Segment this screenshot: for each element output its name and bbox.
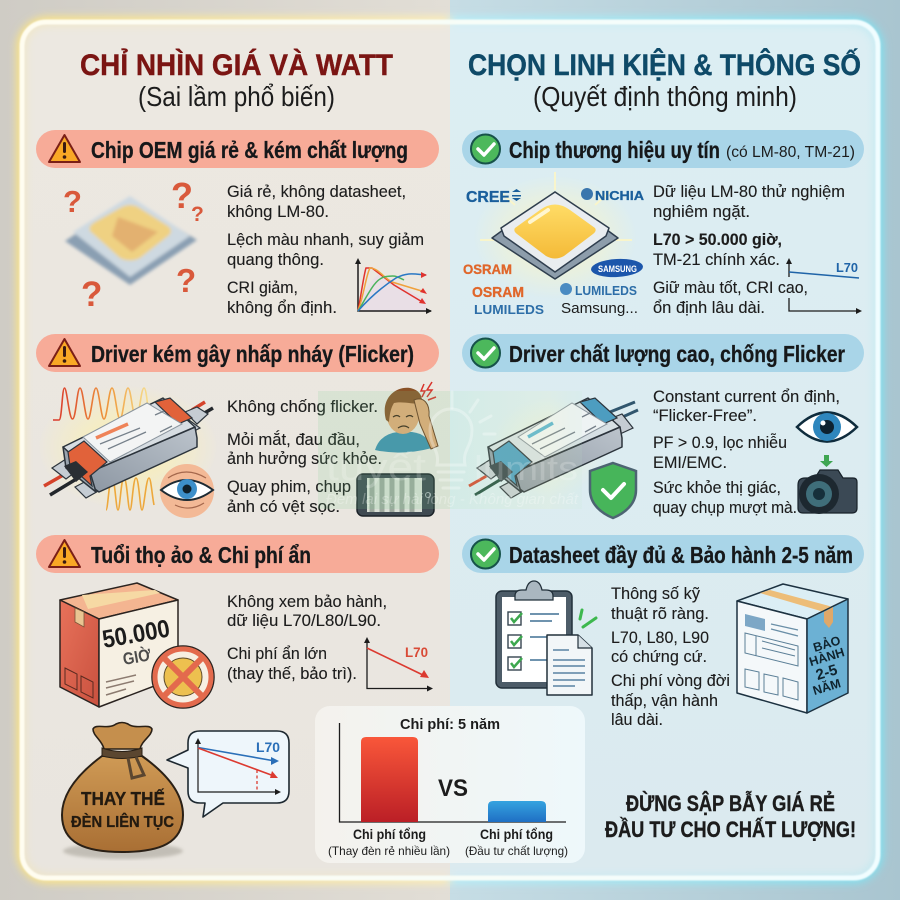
chart: stable L70: L70 [836, 260, 858, 275]
illustration: 50.000 hour box: GIỜ [121, 645, 153, 669]
panel: cost comparison chart: Chi phí: 5 năm [400, 716, 500, 733]
illustration: money bag: ĐÈN LIÊN TỤC [71, 812, 174, 831]
text: datasheet: Chi phí vòng đời [611, 671, 730, 690]
watermark [318, 391, 582, 509]
orange caps [68, 441, 107, 486]
illustration: 50.000 hour box: 50.000 [100, 615, 172, 654]
brand logos: LUMILEDS [575, 284, 637, 298]
banner: chip brand [462, 130, 864, 168]
question marks: ? [191, 203, 204, 226]
terminal block [489, 461, 513, 482]
right heading: CHỌN LINH KIỆN & THÔNG SỐ [468, 48, 861, 82]
banner: driver flicker: Driver kém gây nhấp nháy (Flicker) [91, 341, 414, 367]
illustration: flickering driver [38, 385, 218, 518]
text: chip brand: nghiêm ngặt. [653, 202, 750, 221]
watermark: tuyết [326, 447, 427, 489]
text: chip brand: ổn định lâu dài. [653, 298, 765, 317]
illustration: warranty box: BẢO [811, 632, 842, 655]
illustration: warranty box: HÀNH [807, 644, 846, 669]
brand logos: SAMSUNG [598, 264, 637, 274]
text: driver flicker: Mỏi mắt, đau đầu, [227, 430, 360, 449]
text: datasheet: thấp, vận hành [611, 691, 718, 710]
label plate [83, 403, 182, 462]
brand logos [463, 188, 645, 317]
text: chip OEM: không ổn định. [227, 298, 337, 317]
brand logos: LUMILEDS [474, 302, 544, 317]
brand logos: OSRAM [472, 284, 524, 301]
text: driver flicker: Không chống flicker. [227, 397, 378, 416]
icon: check [471, 134, 500, 164]
chart: falling L70 [364, 637, 433, 692]
chart: degradation curves [355, 258, 432, 314]
document [547, 635, 592, 695]
text: datasheet: thuật rõ ràng. [611, 604, 709, 623]
bar label: cheap [328, 826, 450, 858]
text: driver quality: “Flicker-Free”. [653, 406, 757, 425]
banner: chip brand: Chip thương hiệu uy tín [509, 137, 720, 163]
question marks: ? [171, 175, 193, 216]
text: chip OEM: không LM-80. [227, 202, 329, 221]
mount tabs [52, 407, 208, 498]
banner: lifespan: Tuổi thọ ảo & Chi phí ẩn [91, 542, 311, 568]
flicker waves [53, 388, 154, 510]
icon: warning [49, 135, 80, 162]
text: datasheet [611, 584, 730, 729]
illustration: quality driver [469, 397, 638, 518]
illustration: money bag: THAY THẾ [81, 788, 165, 809]
question marks: ? [176, 262, 196, 299]
illustration: warranty box: NĂM [811, 675, 842, 698]
text: driver flicker [227, 397, 382, 516]
bar label: cheap: (Thay đèn rẻ nhiều lần) [328, 844, 450, 858]
illustration: warranty box: 2-5 [814, 661, 840, 684]
illustration: quality chip with brands: Samsung... [561, 300, 638, 317]
left heading [80, 48, 393, 112]
bar: cheap lamps [361, 737, 418, 822]
bar: quality [488, 801, 546, 822]
conclusion: ĐỪNG SẬP BẪY GIÁ RẺ [626, 790, 835, 816]
text: driver flicker: Quay phim, chụp [227, 477, 351, 496]
icon: check [471, 338, 500, 368]
blue caps [493, 441, 532, 486]
watermark: Đem lại sự hài lòng - Không gian chất [326, 491, 579, 508]
icon: man with headache [375, 382, 438, 453]
callout: speech bubble chart: L70 [256, 739, 280, 755]
chart: falling L70: L70 [405, 644, 428, 660]
panel: cost comparison chart [315, 706, 585, 863]
icon: check [471, 540, 500, 568]
icon: prohibited gear [152, 646, 214, 708]
callout: speech bubble chart [167, 731, 289, 817]
icon: camera [798, 470, 857, 514]
text: driver quality: Sức khỏe thị giác, [653, 478, 781, 497]
banner: datasheet [462, 535, 864, 573]
chart: stable L70 [786, 258, 862, 314]
banner: driver flicker [36, 334, 439, 372]
panel: cost comparison chart: VS [438, 775, 468, 802]
text: datasheet: lâu dài. [611, 710, 663, 729]
text: driver flicker: ảnh hưởng sức khỏe. [227, 449, 382, 468]
illustration: clipboard and document [496, 581, 596, 695]
text: lifespan: Không xem bảo hành, [227, 592, 387, 611]
text: driver quality: Constant current ổn định, [653, 387, 840, 406]
wires [44, 402, 205, 486]
text: datasheet: Thông số kỹ [611, 584, 700, 603]
icon: clear eye [797, 412, 857, 442]
icon: tired eye [160, 464, 214, 518]
left heading: CHỈ NHÌN GIÁ VÀ WATT [80, 48, 393, 82]
question marks [63, 175, 204, 314]
text: lifespan: (thay thế, bảo trì). [227, 664, 357, 683]
question marks: ? [81, 275, 102, 314]
banner: driver quality [462, 334, 864, 372]
text: chip brand [653, 182, 845, 317]
text: chip brand: Giữ màu tốt, CRI cao, [653, 278, 808, 297]
text: chip brand: Dữ liệu LM-80 thử nghiệm [653, 182, 845, 201]
banner: chip brand: (có LM-80, TM-21) [726, 144, 855, 161]
illustration: quality chip with brands [463, 172, 645, 317]
mount tabs [477, 414, 633, 498]
text: driver flicker: ảnh có vệt sọc. [227, 497, 340, 516]
text: chip OEM: Lệch màu nhanh, suy giảm [227, 230, 424, 249]
conclusion [605, 790, 856, 842]
bar label: quality [465, 826, 568, 858]
icon: phone with stripes [357, 474, 434, 516]
text: datasheet: L70, L80, L90 [611, 628, 709, 647]
bar label: quality: (Đầu tư chất lượng) [465, 844, 568, 858]
text: lifespan [227, 592, 387, 683]
bar label: quality: Chi phí tổng [480, 826, 553, 842]
text: chip brand: TM-21 chính xác. [653, 250, 780, 269]
text: chip OEM [227, 182, 424, 317]
left subtitle: (Sai lầm phổ biến) [138, 81, 335, 112]
banner: chip OEM: Chip OEM giá rẻ & kém chất lượng [91, 137, 408, 163]
text: chip OEM: quang thông. [227, 250, 324, 269]
illustration: money bag [62, 722, 183, 859]
question marks: ? [63, 184, 82, 219]
icon: warning [49, 339, 80, 366]
right subtitle: (Quyết định thông minh) [533, 81, 797, 112]
text: chip OEM: Giá rẻ, không datasheet, [227, 182, 406, 201]
icon: green shield [590, 463, 636, 518]
text: lifespan: dữ liệu L70/L80/L90. [227, 611, 381, 630]
watermark: lumits [474, 450, 578, 488]
brand logos: OSRAM [463, 261, 512, 277]
text: driver quality [653, 387, 840, 517]
terminal block [64, 461, 88, 482]
wires [469, 470, 497, 486]
text: chip brand: L70 > 50.000 giờ, [653, 230, 782, 249]
text: driver quality: PF > 0.9, lọc nhiễu [653, 433, 787, 452]
banner: lifespan [36, 535, 439, 573]
case [515, 427, 622, 492]
text: lifespan: Chi phí ẩn lớn [227, 644, 327, 663]
icon: warning [49, 540, 80, 567]
banner: chip OEM [36, 130, 439, 168]
text: chip OEM: CRI giảm, [227, 278, 298, 297]
arrow: eye to camera [820, 455, 833, 467]
text: driver quality: quay chụp mượt mà. [653, 498, 797, 517]
illustration: 50.000 hour box [60, 583, 214, 708]
bar label: cheap: Chi phí tổng [353, 826, 426, 842]
label plate [518, 403, 607, 457]
case [90, 427, 197, 492]
illustration: blurry cheap chip [63, 175, 204, 314]
brand logos: CREE [466, 189, 510, 206]
right heading [468, 48, 861, 112]
text: driver quality: EMI/EMC. [653, 453, 727, 472]
brand logos: NICHIA [595, 188, 645, 203]
text: datasheet: có chứng cứ. [611, 647, 707, 666]
banner: driver quality: Driver chất lượng cao, chống Flicker [509, 341, 845, 367]
illustration: warranty box [737, 584, 848, 713]
